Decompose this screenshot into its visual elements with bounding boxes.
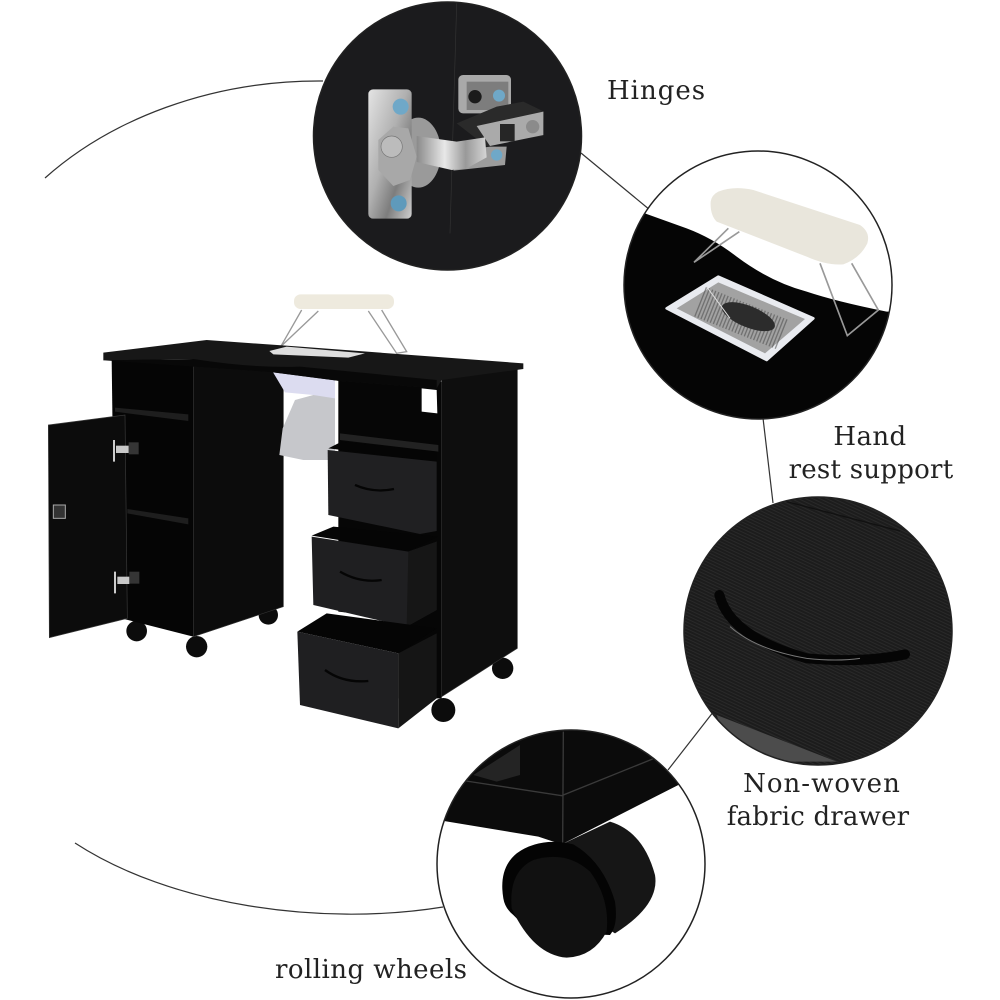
bottom drawer — [297, 613, 437, 728]
casters — [126, 605, 513, 722]
label: Hand rest support: Hand — [833, 422, 907, 452]
detail circle: rolling wheel — [430, 725, 720, 1000]
curved connector: top left — [45, 81, 323, 178]
curved connector: bottom left — [75, 843, 443, 914]
detail circle: fabric drawer — [680, 495, 960, 770]
hand rest on table — [281, 294, 407, 353]
open door — [48, 415, 139, 638]
label: Non-woven fabric drawer: Non-woven — [743, 769, 901, 799]
right cabinet interior — [338, 375, 442, 698]
nail dust bag — [272, 370, 335, 460]
right cabinet side — [442, 365, 517, 697]
connector: hand rest to fabric — [763, 418, 773, 503]
left cabinet side — [193, 360, 283, 637]
open shelf window — [422, 388, 437, 413]
connector: hinges to hand rest — [581, 153, 650, 210]
product: manicure table — [48, 294, 523, 728]
left cabinet interior — [112, 359, 193, 637]
middle drawer — [312, 527, 438, 627]
left cabinet shelves — [115, 408, 188, 524]
detail circle: hinge — [310, 0, 590, 275]
shelf — [340, 433, 438, 452]
label: Hinges: Hinges — [607, 76, 706, 106]
table top — [103, 340, 523, 388]
top drawer — [328, 442, 437, 534]
label: rolling wheels: rolling wheels — [275, 955, 467, 985]
connector: fabric to wheels — [668, 711, 714, 770]
table front edge — [103, 359, 437, 388]
label: Hand rest support: rest support — [789, 455, 954, 485]
label: Non-woven fabric drawer: fabric drawer — [727, 802, 910, 832]
detail circle: hand rest — [623, 150, 893, 420]
tray on table — [269, 347, 365, 358]
